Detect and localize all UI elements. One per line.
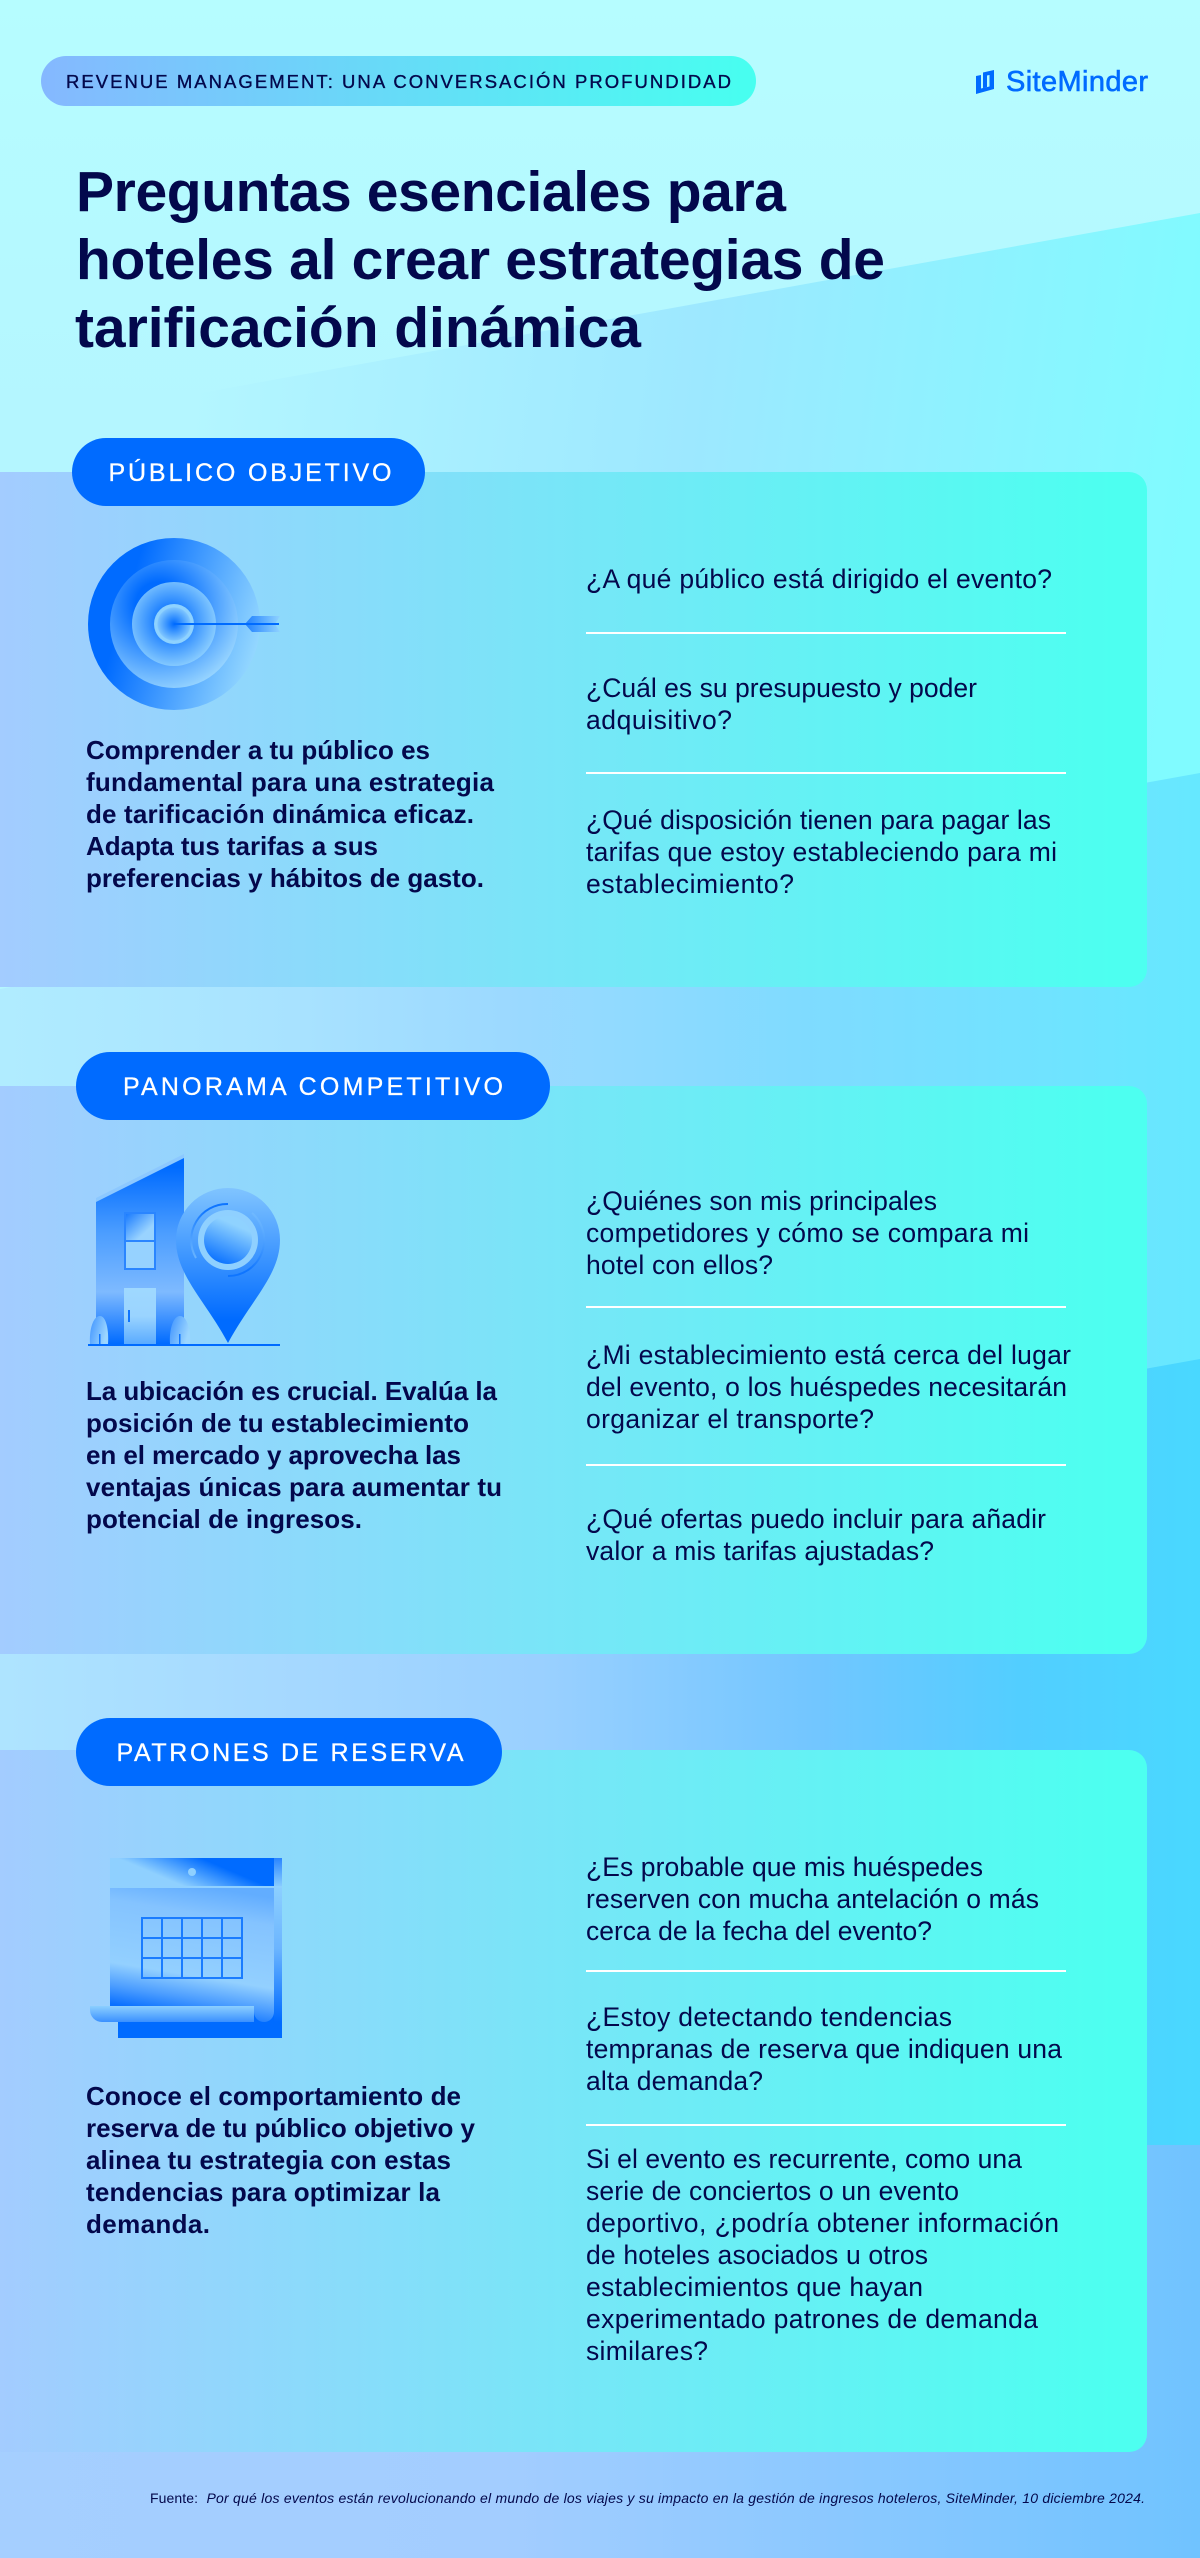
text block: panorama competitivo: posición de tu establecimiento [86,1408,469,1438]
questions: público objetivo [586,564,1066,899]
logo: SiteMinder: SiteMinder [1006,66,1148,98]
footer source note: Fuente: [150,2490,198,2506]
questions: panorama competitivo [586,1186,1071,1566]
text block: patrones de reserva [86,2081,476,2239]
panel: público objetivo [0,438,1147,987]
section pill: público objetivo [72,438,425,506]
text block: público objetivo: fundamental para una estrategia [86,767,495,797]
questions: patrones de reserva: reserven con mucha antelación o más [586,1884,1039,1914]
title: hoteles al crear estrategias de [76,228,885,292]
questions: panorama competitivo: ¿Qué ofertas puedo incluir para añadir [586,1504,1046,1534]
questions: público objetivo: ¿Cuál es su presupuesto y poder [586,673,977,703]
questions: patrones de reserva: Si el evento es recurrente, como una [586,2144,1022,2174]
section pill: patrones de reserva: PATRONES DE RESERVA [116,1739,464,1767]
section pill: panorama competitivo [76,1052,550,1120]
panel: panorama competitivo [0,1052,1147,1654]
panel: patrones de reserva [0,1718,1147,2452]
text block: panorama competitivo: potencial de ingresos. [86,1504,362,1534]
questions: público objetivo: ¿Qué disposición tienen para pagar las [586,805,1051,835]
questions: patrones de reserva: experimentado patrones de demanda [586,2304,1038,2334]
text block: patrones de reserva: tendencias para optimizar la [86,2177,441,2207]
questions: panorama competitivo: hotel con ellos? [586,1250,773,1280]
title [75,160,885,360]
text block: público objetivo: de tarificación dinámica eficaz. [86,799,474,829]
questions: patrones de reserva: ¿Estoy detectando tendencias [586,2002,952,2032]
questions: panorama competitivo: organizar el transporte? [586,1404,874,1434]
questions: público objetivo: tarifas que estoy estableciendo para mi [586,837,1057,867]
questions: patrones de reserva: tempranas de reserva que indiquen una [586,2034,1062,2064]
text block: patrones de reserva: demanda. [86,2209,210,2239]
title: tarificación dinámica [75,296,642,360]
questions: público objetivo: establecimiento? [586,869,794,899]
questions: patrones de reserva: alta demanda? [586,2066,763,2096]
questions: público objetivo: adquisitivo? [586,705,732,735]
text block: panorama competitivo: en el mercado y aprovecha las [86,1440,461,1470]
questions: patrones de reserva: similares? [586,2336,708,2366]
icon: target with arrow [88,538,280,710]
questions: panorama competitivo: valor a mis tarifas ajustadas? [586,1536,934,1566]
text block: patrones de reserva: Conoce el comportamiento de [86,2081,461,2111]
section pill: público objetivo: PÚBLICO OBJETIVO [108,458,392,487]
text block: público objetivo: Adapta tus tarifas a sus [86,831,378,861]
text block: panorama competitivo: ventajas únicas para aumentar tu [86,1472,502,1502]
text block: público objetivo: preferencias y hábitos de gasto. [86,863,484,893]
questions: panorama competitivo: del evento, o los huéspedes necesitarán [586,1372,1067,1402]
questions: patrones de reserva: serie de conciertos o un evento [586,2176,959,2206]
section pill: patrones de reserva [76,1718,502,1786]
questions: panorama competitivo: ¿Mi establecimiento está cerca del lugar [586,1340,1071,1370]
text block: patrones de reserva: alinea tu estrategia con estas [86,2145,451,2175]
footer source note: Por qué los eventos están revolucionando el mundo de los viajes y su impacto en la gestión de ingresos hoteleros, SiteMinder, 10 diciembre 2024. [206,2490,1145,2506]
questions: patrones de reserva: ¿Es probable que mis huéspedes [586,1852,983,1882]
questions: patrones de reserva: deportivo, ¿podría obtener información [586,2208,1059,2238]
text block: panorama competitivo [86,1376,502,1534]
title: Preguntas esenciales para [76,160,787,224]
icon: hotel building and location pin [88,1154,280,1346]
questions: patrones de reserva: establecimientos que hayan [586,2272,923,2302]
questions: panorama competitivo: competidores y cómo se compara mi [586,1218,1029,1248]
header tag pill: REVENUE MANAGEMENT: UNA CONVERSACIÓN PROFUNDIDAD [66,71,731,92]
header tag pill [41,56,756,106]
questions: patrones de reserva: de hoteles asociados u otros [586,2240,928,2270]
section pill: panorama competitivo: PANORAMA COMPETITIVO [123,1073,503,1101]
questions: público objetivo: ¿A qué público está dirigido el evento? [586,564,1052,594]
questions: patrones de reserva [586,1852,1066,2366]
text block: público objetivo: Comprender a tu público es [86,735,430,765]
text block: público objetivo [86,735,495,893]
text block: panorama competitivo: La ubicación es crucial. Evalúa la [86,1376,498,1406]
text block: patrones de reserva: reserva de tu público objetivo y [86,2113,476,2143]
questions: panorama competitivo: ¿Quiénes son mis principales [586,1186,937,1216]
questions: patrones de reserva: cerca de la fecha del evento? [586,1916,932,1946]
icon: calendar [90,1858,282,2038]
